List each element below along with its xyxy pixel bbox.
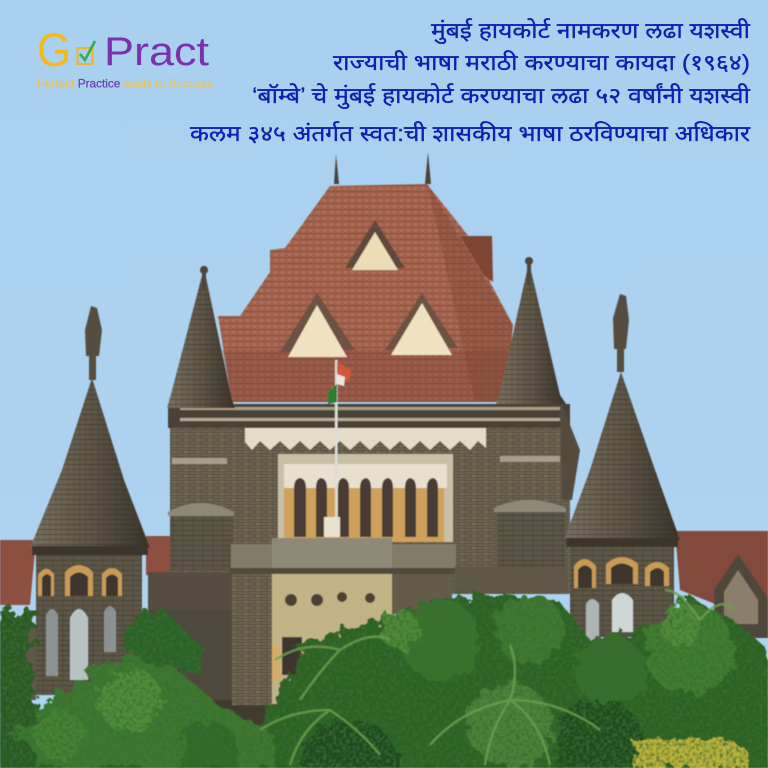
logo letter G: G <box>37 23 71 76</box>
foreground palm fronds <box>260 590 735 765</box>
balcony parapet <box>230 538 456 574</box>
left tree canopy <box>0 657 275 768</box>
yellow flowering shrub <box>632 739 748 768</box>
statue on left tower <box>85 306 102 380</box>
logo word Pract: Pract <box>104 30 209 74</box>
right tree canopy <box>262 592 768 768</box>
heading text block <box>190 18 751 146</box>
lower facade with portholes <box>148 566 567 750</box>
heading line 1: मुंबई हायकोर्ट नामकरण लढा यशस्वी <box>431 18 750 44</box>
left tower shaft <box>168 428 234 570</box>
arcade panel <box>278 454 453 542</box>
heading line 2: राज्याची भाषा मराठी करण्याचा कायदा (१९६४) <box>333 50 750 75</box>
heading line 4: कलम ३४५ अंतर्गत स्वत:ची शासकीय भाषा ठरविण्याचा अधिकार <box>190 121 751 146</box>
solid foliage base filling the ground edge <box>0 625 768 768</box>
emblem <box>324 517 340 537</box>
statue on right tower <box>613 294 629 372</box>
main roof <box>218 152 513 402</box>
left outer tower <box>30 306 150 695</box>
main stone facade <box>168 400 580 594</box>
heading line 3: ‘बॉम्बे’ चे मुंबई हायकोर्ट करण्याचा लढा ५२ वर्षांनी यशस्वी <box>252 83 750 109</box>
flag on pole <box>328 360 351 520</box>
finials <box>334 152 431 184</box>
side roofs <box>0 531 768 700</box>
logo tagline: Perfect Practice leads to Success <box>37 76 213 90</box>
right tower shaft <box>494 428 566 568</box>
white zigzag frieze <box>245 428 486 450</box>
arcade windows <box>294 478 438 537</box>
left inner spire <box>167 266 235 408</box>
left palms <box>0 606 205 735</box>
right dormer <box>385 293 458 355</box>
left dormer <box>280 293 355 357</box>
icon: green check in box <box>78 41 95 64</box>
top dormer <box>345 220 405 270</box>
right outer tower <box>564 294 680 640</box>
logo: GoPract <box>37 23 213 90</box>
trees foreground <box>0 592 768 768</box>
right inner spire <box>496 257 566 404</box>
